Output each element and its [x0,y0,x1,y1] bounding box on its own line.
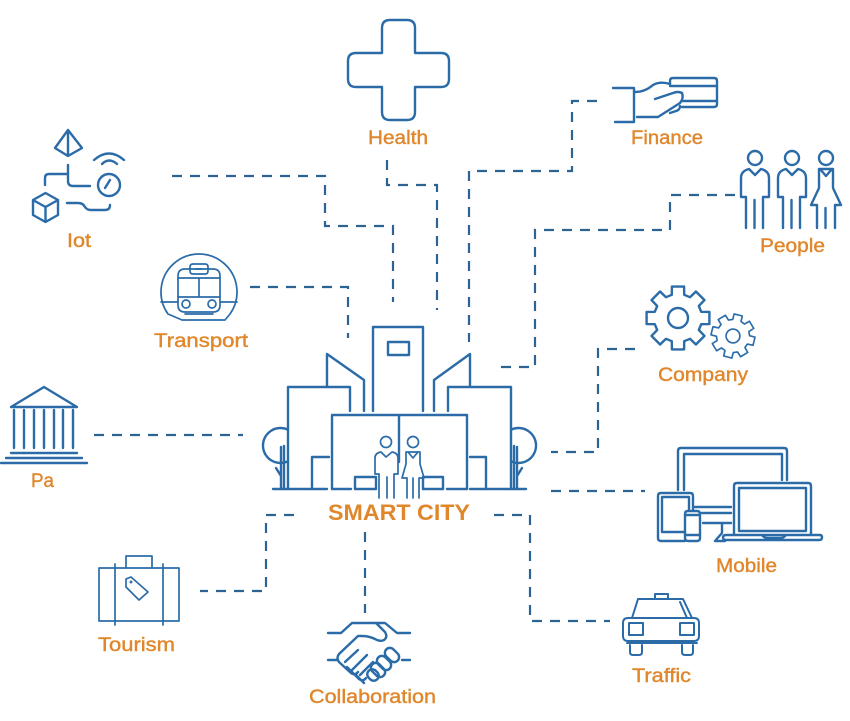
connector: Traffic to city [494,515,610,621]
connector: People to city [500,195,735,367]
icon: tourism suitcase [99,556,179,625]
benches [355,477,443,489]
person 3 [811,151,841,228]
left buildings [288,354,364,489]
icon: finance hand and card [613,78,717,122]
title: SMART CITY: SMART CITY [328,500,470,525]
large gear [647,287,709,349]
label: Pa: Pa [31,471,54,492]
label: Traffic: Traffic [632,666,691,687]
connector: Finance to city [469,101,597,342]
connector: Mobile to city [551,490,645,492]
icon: transport train [161,254,237,320]
icon: iot [33,130,124,222]
label: Company: Company [658,365,749,386]
icon: mobile devices [658,448,822,541]
label: Collaboration: Collaboration [309,687,436,708]
icon: public administration building [1,387,87,463]
label: Mobile: Mobile [716,556,777,577]
label: Transport: Transport [154,331,249,352]
icon: company gears [647,287,759,362]
connector: Collaboration to city [364,532,366,613]
right tree [511,428,536,489]
cuffs and top of hands [328,623,410,660]
connector: Pa to city [94,434,243,436]
left tree [263,428,288,489]
connector: Transport to city [250,287,348,338]
thumb and left hand outline [338,623,386,683]
front buildings [332,415,467,489]
connector: Tourism to city [200,515,294,591]
right buildings [434,354,511,489]
connector: Iot to city [172,176,393,302]
icon: people [741,151,841,228]
icon: collaboration handshake [328,623,410,683]
finger separators [345,650,373,675]
icon: central city [263,327,536,498]
icon: traffic taxi [623,594,699,655]
city woman [402,436,424,498]
ground line [273,488,526,490]
central tower [373,327,423,411]
label: Iot: Iot [67,231,92,252]
connector: Company to city [551,349,635,452]
right hand fingers [383,646,401,664]
small gear [707,310,759,362]
person 2 [778,151,806,228]
label: Tourism: Tourism [98,635,175,656]
city man [375,436,398,498]
label: Finance: Finance [631,128,703,149]
person 1 [741,151,769,228]
connector: Health to city [387,160,437,310]
label: Health: Health [368,128,428,149]
label: People: People [760,236,825,257]
icon: health cross [348,20,449,120]
